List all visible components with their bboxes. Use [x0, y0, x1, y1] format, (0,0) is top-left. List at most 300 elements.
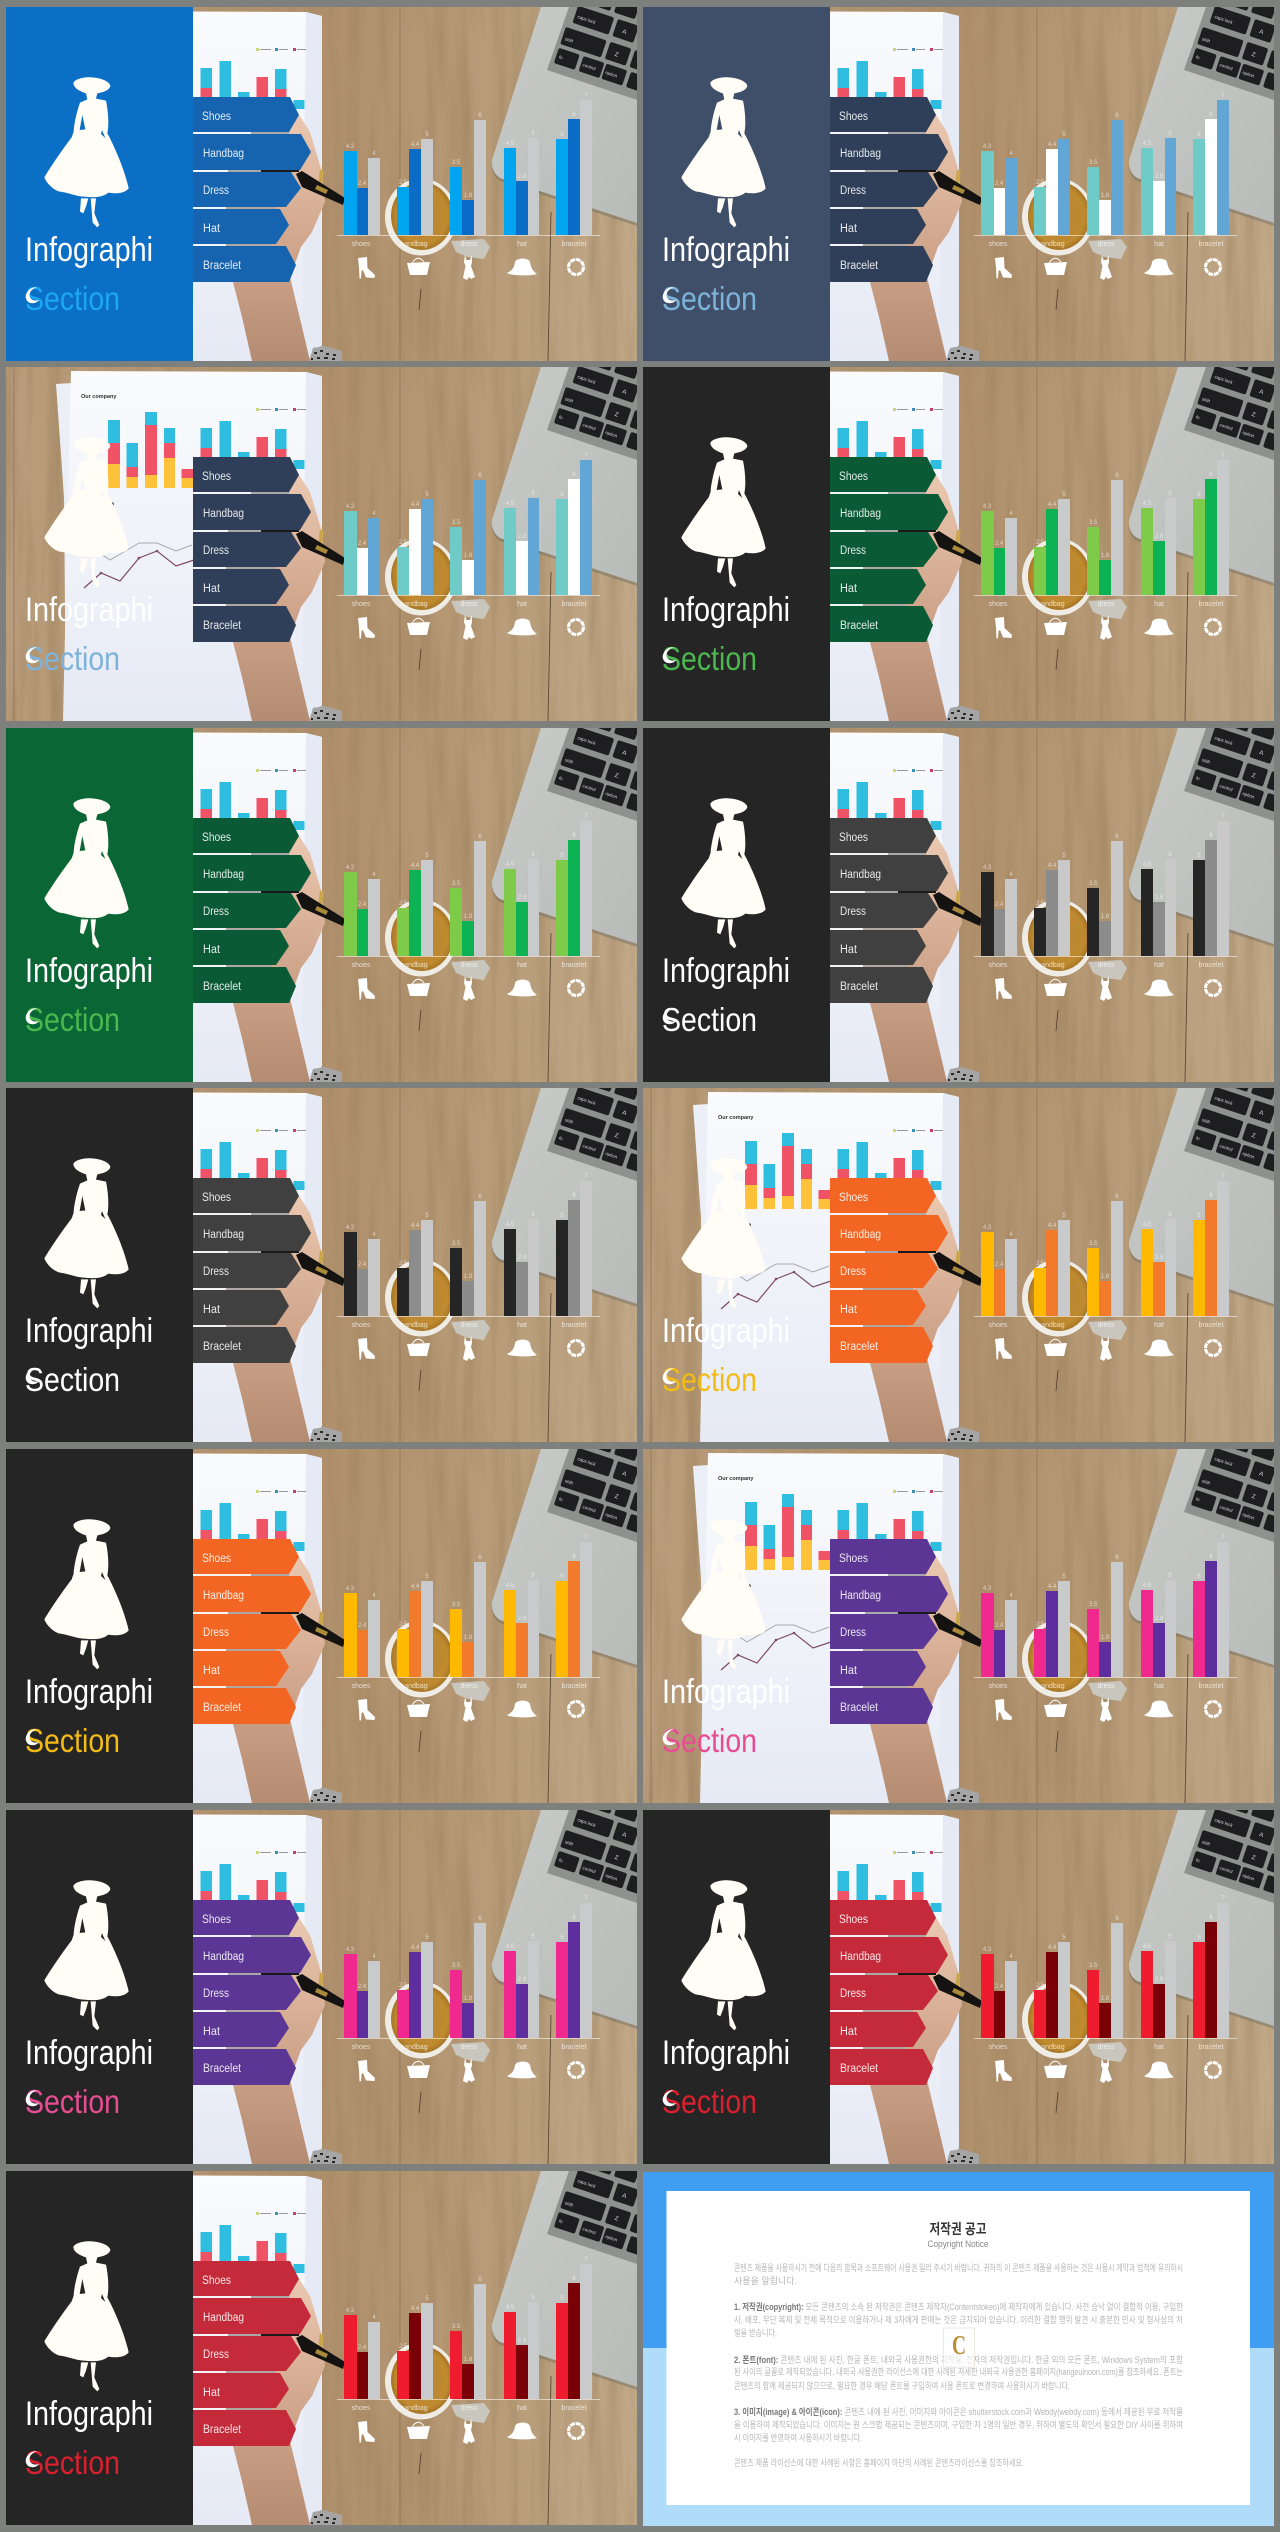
- bar chart: 2.5: [399, 180, 408, 186]
- heading: Infographi: Infographi: [662, 2034, 790, 2072]
- notice background lower pale blue: [643, 2348, 1274, 2526]
- bar chart: bracelet: [562, 241, 587, 248]
- bar chart: 4.3: [346, 144, 355, 150]
- arrow menu: Hat: [840, 1665, 858, 1677]
- bar chart: 4.3: [983, 865, 992, 871]
- arrow menu: Dress: [203, 906, 229, 918]
- bar chart: 6: [572, 1193, 576, 1199]
- bar chart: handbag: [1037, 962, 1065, 969]
- bar chart: handbag: [1037, 2044, 1065, 2051]
- background photo: [643, 1424, 1280, 1803]
- slide: black panel, orange accents: [6, 1424, 702, 1803]
- slide: orange, no panel: [643, 1063, 1280, 1442]
- bar chart: 1.8: [464, 1996, 473, 2002]
- bar chart: 3.5: [1089, 1602, 1098, 1608]
- arrow menu: Hat: [203, 583, 221, 595]
- bar chart: 4.5: [1143, 1222, 1152, 1228]
- bar chart: [337, 93, 600, 248]
- heading: Section: Section: [25, 1361, 120, 1398]
- panel: copyright notice: [643, 2172, 1274, 2526]
- arrow menu: Handbag: [203, 2312, 244, 2324]
- bar chart: 5: [425, 1935, 429, 1941]
- bar chart: 3.5: [452, 160, 461, 166]
- slide: black panel, red accents: [643, 1785, 1280, 2164]
- notice section 2: font: 2. 폰트(font): 콘텐츠 내에 된 사진, 한글 폰트, 내외국 사용권한의 저작물, 전자의 저작권입니다. 한글 외의 모든 폰트, Windows System의 포함: [734, 2354, 1183, 2365]
- bar chart: 5: [1168, 491, 1172, 497]
- bar chart: 1.8: [1101, 553, 1110, 559]
- bar chart: 5: [560, 1213, 564, 1219]
- arrow menu: Hat: [840, 2026, 858, 2038]
- bar chart: 6: [478, 1916, 482, 1922]
- arrow menu: Shoes: [202, 1192, 231, 1204]
- arrow menu: Shoes: [202, 1914, 231, 1926]
- heading: Infographi: Infographi: [25, 2395, 153, 2433]
- bar chart: 2.4: [995, 902, 1004, 908]
- bar chart: bracelet: [562, 2405, 587, 2412]
- bar chart: 2.4: [995, 541, 1004, 547]
- bar chart: 1.8: [1101, 914, 1110, 920]
- bar chart: 1.8: [464, 1274, 473, 1280]
- arrow menu: Bracelet: [203, 981, 242, 993]
- arrow menu: Bracelet: [203, 2063, 242, 2075]
- icon: lady silhouette: [44, 437, 129, 587]
- bar chart: shoes: [989, 241, 1008, 248]
- icons: shoe, bag, dress, hat, bracelet: [995, 615, 1220, 640]
- arrow menu: Dress: [203, 1988, 229, 2000]
- notice section 1: copyright: 1. 저작권(copyright): 모든 콘텐츠의 소속 된 저작권은 콘텐츠 제작자(Contentstokeo)에 제작자에게 있습니다. 사전 승낙 없이 결합적 이용, 구입한: [734, 2301, 1183, 2312]
- bar chart: 7: [1221, 1174, 1225, 1180]
- arrow menu: Bracelet: [203, 2424, 242, 2436]
- arrow menu: [193, 1539, 311, 1724]
- notice section 3: image and icon: 을 이용하여 제작되었습니다. 이미지는 원 스크랩 제공되는 콘텐츠이며, 구입한 자 1명의 일반 경우, 위하여 별도의 확인서 필요한 DIY 사이를 위하여: [734, 2419, 1183, 2430]
- bar chart: dress: [460, 601, 478, 608]
- bar chart: 6: [1115, 1555, 1119, 1561]
- bar chart: 4.3: [346, 865, 355, 871]
- icons: shoe, bag, dress, hat, bracelet: [995, 2058, 1220, 2083]
- notice section 1: copyright: 벌을 받습니다.: [734, 2328, 777, 2338]
- bar chart: 6: [1209, 1915, 1213, 1921]
- bar chart: 2.4: [358, 1623, 367, 1629]
- background photo: [6, 703, 702, 1082]
- bar chart: 5: [1197, 1213, 1201, 1219]
- bar chart: 4.4: [1048, 1945, 1057, 1951]
- arrow menu: Bracelet: [840, 1341, 879, 1353]
- arrow menu: [830, 1178, 948, 1363]
- bar chart: bracelet: [562, 1683, 587, 1690]
- bar chart: dress: [1097, 601, 1115, 608]
- bar chart: 6: [1115, 834, 1119, 840]
- bar chart: 1.8: [464, 914, 473, 920]
- bar chart: 7: [584, 453, 588, 459]
- bar chart: [974, 814, 1237, 969]
- slide: purple, no panel: [643, 1424, 1280, 1803]
- bar chart: 4.5: [506, 1583, 515, 1589]
- bar chart: 7: [1221, 93, 1225, 99]
- left panel: [643, 728, 830, 1082]
- heading: Infographi: Infographi: [25, 1673, 153, 1711]
- left panel: [6, 2171, 193, 2525]
- bar chart: 5: [1197, 1574, 1201, 1580]
- arrow menu: Shoes: [839, 1192, 868, 1204]
- bar chart: 6: [1115, 1194, 1119, 1200]
- bar chart: shoes: [352, 241, 371, 248]
- bar chart: 6: [572, 1915, 576, 1921]
- notice title: 저작권 공고: [930, 2221, 987, 2237]
- arrow menu: Handbag: [203, 508, 244, 520]
- bar chart: shoes: [989, 1683, 1008, 1690]
- bar chart: bracelet: [1199, 962, 1224, 969]
- bar chart: 4.3: [346, 1225, 355, 1231]
- bar chart: hat: [1154, 241, 1164, 248]
- arrow menu: Shoes: [202, 1553, 231, 1565]
- bar chart: 6: [478, 1194, 482, 1200]
- bar chart: 6: [1209, 1193, 1213, 1199]
- bar chart: 4.3: [346, 2308, 355, 2314]
- heading: Section: Section: [662, 1001, 757, 1038]
- bar chart: 5: [560, 1574, 564, 1580]
- notice section 2: font: 콘텐츠의 함께 제공되지 않으므로, 필요한 경우 해당 폰트를 구입하여 사용 폰트로 변경하여 사용하시기 바랍니다.: [734, 2380, 1070, 2391]
- bar chart: 4.4: [1048, 142, 1057, 148]
- bar chart: bracelet: [1199, 1683, 1224, 1690]
- bar chart: shoes: [352, 601, 371, 608]
- arrow menu: Bracelet: [840, 981, 879, 993]
- icons: shoe, bag, dress, hat, bracelet: [358, 2419, 584, 2444]
- arrow menu: [193, 1178, 311, 1363]
- icon: lady silhouette: [44, 1519, 129, 1669]
- bar chart: 4.4: [1048, 863, 1057, 869]
- bar chart: dress: [1097, 1322, 1115, 1329]
- bar chart: 5: [560, 1935, 564, 1941]
- bar chart: bracelet: [1199, 1322, 1224, 1329]
- slide: green panel: [6, 703, 702, 1082]
- icon: C logo: [944, 2328, 974, 2367]
- bar chart: 5: [531, 852, 535, 858]
- bar chart: 7: [1221, 453, 1225, 459]
- icons: shoe, bag, dress, hat, bracelet: [358, 2058, 584, 2083]
- arrow menu: Hat: [203, 1665, 221, 1677]
- bar chart: dress: [460, 241, 478, 248]
- heading: Infographi: Infographi: [662, 591, 790, 629]
- notice section 3: image and icon: [734, 2406, 1183, 2443]
- bar chart: 2.4: [995, 181, 1004, 187]
- bar chart: 5: [1062, 1935, 1066, 1941]
- bar chart: 3.5: [452, 881, 461, 887]
- bar chart: 1.8: [464, 2357, 473, 2363]
- bar chart: 2.5: [399, 540, 408, 546]
- arrow menu: Shoes: [839, 111, 868, 123]
- bar chart: 4: [1009, 1954, 1013, 1960]
- bar chart: 2.8: [1155, 534, 1164, 540]
- heading: Section: Section: [25, 2444, 120, 2481]
- bar chart: bracelet: [562, 2044, 587, 2051]
- bar chart: 7: [584, 93, 588, 99]
- notice section 1: copyright: 사, 배포, 무단 복제 및 전체 목적으로 이용하거나 제 3자에게 판매는 것은 금지되어 있습니다. 이러한 결합 행위 발견 시 충분한 민사 및 형사상의 처: [734, 2314, 1183, 2325]
- notice section 3: image and icon: 시 이미지를 반영하여 사용하시기 바랍니다.: [734, 2432, 862, 2443]
- arrow menu: Shoes: [202, 111, 231, 123]
- bar chart: 5: [1197, 853, 1201, 859]
- arrow menu: Handbag: [203, 148, 244, 160]
- arrow menu: Bracelet: [840, 260, 879, 272]
- arrow menu: Hat: [203, 223, 221, 235]
- arrow menu: Shoes: [202, 471, 231, 483]
- icon: lady silhouette: [681, 1519, 766, 1669]
- icon: lady silhouette: [44, 798, 129, 948]
- background photo: [6, 1424, 702, 1803]
- bar chart: 5: [1197, 132, 1201, 138]
- bar chart: bracelet: [562, 601, 587, 608]
- heading: Infographi: Infographi: [662, 1673, 790, 1711]
- bar chart: [337, 453, 600, 608]
- bar chart: 4.4: [1048, 1223, 1057, 1229]
- bar chart: 6: [1115, 473, 1119, 479]
- bar chart: hat: [517, 241, 527, 248]
- bar chart: dress: [1097, 1683, 1115, 1690]
- icons: shoe, bag, dress, hat, bracelet: [358, 1697, 584, 1722]
- bar chart: 2.8: [518, 1616, 527, 1622]
- bar chart: 5: [1197, 492, 1201, 498]
- bar chart: 2.4: [358, 541, 367, 547]
- bar chart: 2.4: [995, 1984, 1004, 1990]
- bar chart: 4.3: [346, 504, 355, 510]
- bar chart: shoes: [352, 2405, 371, 2412]
- bar chart: 6: [478, 473, 482, 479]
- bar chart: 7: [584, 1174, 588, 1180]
- notice intro text: 사용을 알립니다.: [734, 2276, 797, 2286]
- bar chart: dress: [1097, 962, 1115, 969]
- bar chart: 5: [1062, 1574, 1066, 1580]
- notice section 1: copyright: [734, 2301, 1183, 2338]
- bar chart: 3.5: [452, 2324, 461, 2330]
- bar chart: 5: [425, 2296, 429, 2302]
- slide: black panel, gray accents: [643, 703, 1280, 1082]
- bar chart: dress: [460, 962, 478, 969]
- bar chart: [337, 2257, 600, 2412]
- bar chart: 6: [572, 1554, 576, 1560]
- arrow menu: Shoes: [839, 832, 868, 844]
- bar chart: handbag: [400, 1683, 428, 1690]
- bar chart: 4.4: [411, 502, 420, 508]
- bar chart: 3.5: [1089, 1241, 1098, 1247]
- bar chart: 5: [1168, 1573, 1172, 1579]
- bar chart: 4.4: [1048, 1584, 1057, 1590]
- slide: slate panel: [643, 0, 1280, 361]
- bar chart: 3.5: [452, 520, 461, 526]
- bar chart: 6: [478, 2277, 482, 2283]
- bar chart: 2.4: [995, 1623, 1004, 1629]
- notice section 2: font: [734, 2354, 1183, 2391]
- bar chart: 4.5: [506, 1222, 515, 1228]
- bar chart: shoes: [352, 1683, 371, 1690]
- arrow menu: Dress: [840, 906, 866, 918]
- bar chart: [974, 1896, 1237, 2051]
- left panel: [6, 1810, 193, 2164]
- background photo: [643, 1063, 1280, 1442]
- bar chart: shoes: [352, 2044, 371, 2051]
- bar chart: bracelet: [562, 1322, 587, 1329]
- bar chart: 4.4: [411, 2306, 420, 2312]
- arrow menu: [830, 97, 948, 282]
- heading: Section: Section: [25, 640, 120, 677]
- bar chart: 4.4: [411, 863, 420, 869]
- bar chart: 4: [372, 1954, 376, 1960]
- arrow menu: Bracelet: [203, 260, 242, 272]
- arrow menu: Hat: [840, 223, 858, 235]
- heading: Infographi: Infographi: [25, 591, 153, 629]
- bar chart: handbag: [400, 2405, 428, 2412]
- heading: Infographi: Infographi: [25, 952, 153, 990]
- arrow menu: Bracelet: [840, 2063, 879, 2075]
- bar chart: 4.5: [1143, 501, 1152, 507]
- bar chart: hat: [1154, 1322, 1164, 1329]
- slide: slate, no panel: [6, 342, 702, 721]
- heading: Infographi: Infographi: [25, 2034, 153, 2072]
- bar chart: handbag: [400, 2044, 428, 2051]
- bar chart: 6: [1209, 833, 1213, 839]
- bar chart: 6: [572, 2276, 576, 2282]
- background photo: [643, 1785, 1280, 2164]
- background photo: [643, 703, 1280, 1082]
- bar chart: hat: [1154, 601, 1164, 608]
- icons: shoe, bag, dress, hat, bracelet: [995, 1336, 1220, 1361]
- bar chart: dress: [460, 1683, 478, 1690]
- bar chart: bracelet: [1199, 601, 1224, 608]
- arrow menu: Shoes: [202, 2275, 231, 2287]
- arrow menu: [830, 1539, 948, 1724]
- left panel: [6, 1449, 193, 1803]
- arrow menu: Handbag: [203, 869, 244, 881]
- arrow menu: Shoes: [839, 1553, 868, 1565]
- bar chart: 3.5: [1089, 1963, 1098, 1969]
- arrow menu: Hat: [840, 944, 858, 956]
- arrow menu: Handbag: [840, 869, 881, 881]
- icon: lady silhouette: [681, 77, 766, 227]
- bar chart: bracelet: [1199, 241, 1224, 248]
- bar chart: 4.5: [1143, 1583, 1152, 1589]
- icon: lady silhouette: [44, 77, 129, 227]
- bar chart: handbag: [1037, 241, 1065, 248]
- bar chart: 4: [372, 511, 376, 517]
- bar chart: 2.5: [399, 2344, 408, 2350]
- background photo: [6, 1785, 702, 2164]
- arrow menu: Dress: [840, 185, 866, 197]
- heading: Infographi: Infographi: [25, 1312, 153, 1350]
- bar chart: 4.3: [346, 1947, 355, 1953]
- bar chart: 2.5: [399, 1622, 408, 1628]
- bar chart: 2.8: [1155, 1616, 1164, 1622]
- bar chart: 4.3: [983, 1225, 992, 1231]
- bar chart: 2.8: [518, 1255, 527, 1261]
- bar chart: [337, 1896, 600, 2051]
- bar chart: 2.4: [995, 1262, 1004, 1268]
- icon: lady silhouette: [681, 798, 766, 948]
- bar chart: handbag: [400, 601, 428, 608]
- background photo: [6, 342, 702, 721]
- bar chart: 6: [478, 113, 482, 119]
- arrow menu: Hat: [203, 944, 221, 956]
- arrow menu: [193, 818, 311, 1003]
- arrow menu: Dress: [203, 2349, 229, 2361]
- bar chart: hat: [517, 601, 527, 608]
- bar chart: 5: [560, 853, 564, 859]
- arrow menu: [193, 457, 311, 642]
- icon: lady silhouette: [44, 1880, 129, 2030]
- icons: shoe, bag, dress, hat, bracelet: [358, 255, 584, 280]
- slide: blue panel: [6, 0, 702, 361]
- arrow menu: Hat: [203, 2026, 221, 2038]
- notice background upper blue: [643, 2172, 1274, 2348]
- bar chart: 5: [531, 491, 535, 497]
- bar chart: [974, 93, 1237, 248]
- bar chart: shoes: [352, 962, 371, 969]
- icons: shoe, bag, dress, hat, bracelet: [358, 615, 584, 640]
- bar chart: 1.8: [1101, 1635, 1110, 1641]
- bar chart: 2.8: [518, 534, 527, 540]
- bar chart: 6: [572, 472, 576, 478]
- bar chart: 4: [1009, 511, 1013, 517]
- bar chart: 5: [1197, 1935, 1201, 1941]
- left panel: [6, 7, 193, 361]
- bar chart: 5: [1168, 131, 1172, 137]
- bar chart: 4.5: [1143, 1944, 1152, 1950]
- bar chart: 7: [584, 814, 588, 820]
- bar chart: 1.8: [1101, 193, 1110, 199]
- bar chart: shoes: [989, 962, 1008, 969]
- background photo: [643, 0, 1280, 361]
- bar chart: 7: [1221, 1896, 1225, 1902]
- bar chart: 5: [560, 492, 564, 498]
- white notice card: [666, 2191, 1250, 2505]
- bar chart: [974, 453, 1237, 608]
- arrow menu: Handbag: [203, 1229, 244, 1241]
- slide: black panel, red accents (second): [6, 2146, 702, 2525]
- bar chart: 2.8: [518, 1977, 527, 1983]
- bar chart: 4: [1009, 1593, 1013, 1599]
- bar chart: [337, 1174, 600, 1329]
- bar chart: 2.8: [518, 895, 527, 901]
- bar chart: 4.5: [506, 862, 515, 868]
- bar chart: bracelet: [1199, 2044, 1224, 2051]
- bar chart: 3.5: [1089, 160, 1098, 166]
- bar chart: 2.5: [1036, 540, 1045, 546]
- bar chart: 4.4: [411, 142, 420, 148]
- arrow menu: [830, 457, 948, 642]
- bar chart: 5: [531, 1573, 535, 1579]
- icon: C logo: C: [952, 2330, 966, 2360]
- arrow menu: [193, 2261, 311, 2446]
- bar chart: 4.3: [983, 1947, 992, 1953]
- bar chart: [974, 1535, 1237, 1690]
- bar chart: 3.5: [1089, 881, 1098, 887]
- heading: Section: Section: [662, 280, 757, 317]
- arrow menu: [830, 818, 948, 1003]
- bar chart: 3.5: [1089, 520, 1098, 526]
- bar chart: 2.4: [358, 1984, 367, 1990]
- arrow menu: Shoes: [839, 1914, 868, 1926]
- bar chart: 5: [425, 492, 429, 498]
- heading: Section: Section: [662, 640, 757, 677]
- bar chart: handbag: [1037, 1683, 1065, 1690]
- arrow menu: Handbag: [840, 1590, 881, 1602]
- bar chart: 3.5: [452, 1602, 461, 1608]
- bar chart: 4.3: [346, 1586, 355, 1592]
- background photo: [6, 0, 702, 361]
- heading: Section: Section: [25, 1722, 120, 1759]
- arrow menu: Dress: [203, 1627, 229, 1639]
- bar chart: handbag: [1037, 601, 1065, 608]
- notice intro text: [734, 2262, 1183, 2286]
- bar chart: [337, 1535, 600, 1690]
- arrow menu: Dress: [840, 545, 866, 557]
